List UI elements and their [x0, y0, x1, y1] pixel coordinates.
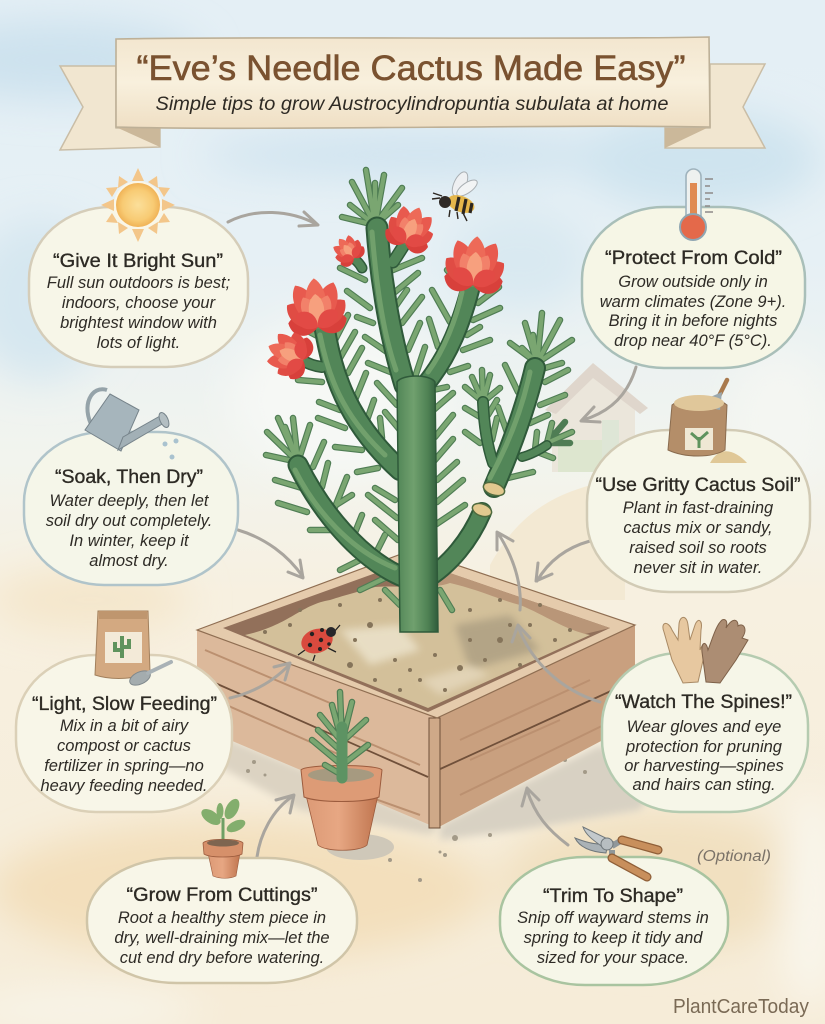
small potted cactus — [301, 692, 394, 860]
flowers — [376, 197, 445, 261]
callout: Watch The Spines!: Wear gloves and eye — [627, 718, 781, 736]
callout: Soak, Then Dry: In winter, keep it — [69, 532, 190, 550]
callout: Grow From Cuttings: “Grow From Cuttings” — [126, 885, 318, 906]
callout: Grow From Cuttings — [87, 858, 357, 983]
icon: watering can — [85, 389, 178, 460]
title: “Eve’s Needle Cactus Made Easy” — [136, 49, 686, 88]
callout: Soak, Then Dry: Water deeply, then let — [50, 492, 210, 510]
arrow: sun to plant — [228, 212, 318, 226]
callout: Use Gritty Cactus Soil: raised soil so roots — [629, 539, 767, 557]
callout: Light, Slow Feeding — [16, 655, 232, 812]
callout: Use Gritty Cactus Soil: “Use Gritty Cactus Soil” — [596, 475, 800, 496]
brand footer: PlantCareToday — [673, 996, 809, 1018]
callout: Soak, Then Dry: almost dry. — [89, 552, 169, 570]
callout: Trim To Shape — [500, 857, 728, 985]
callout: Give It Bright Sun: “Give It Bright Sun” — [53, 251, 223, 272]
callout: Trim To Shape: sized for your space. — [537, 949, 689, 967]
arrow: feeding to planter — [230, 663, 290, 698]
arrow: soil to planter — [536, 541, 590, 581]
callout: Give It Bright Sun — [29, 207, 248, 367]
callout: Grow From Cuttings: dry, well-draining mix—let the — [114, 929, 330, 947]
callout: Light, Slow Feeding: heavy feeding needed. — [41, 777, 207, 795]
icon: bee — [432, 170, 480, 221]
callout: Give It Bright Sun: Full sun outdoors is best; — [47, 274, 231, 292]
icon: thermometer — [680, 169, 713, 240]
arrows — [228, 212, 636, 857]
title banner — [60, 37, 765, 150]
callout: Grow From Cuttings: Root a healthy stem piece in — [118, 909, 326, 927]
cactus spine leaves — [266, 170, 572, 610]
callout: Use Gritty Cactus Soil — [587, 430, 810, 592]
callout: Watch The Spines! — [602, 653, 808, 812]
callout: Protect From Cold: Grow outside only in — [618, 273, 768, 291]
callout: Watch The Spines!: protection for pruning — [625, 738, 783, 756]
callout: Give It Bright Sun: lots of light. — [97, 334, 180, 352]
cactus trunk — [397, 376, 438, 632]
callout: Protect From Cold: warm climates (Zone 9+). — [600, 293, 786, 311]
callout: Trim To Shape: “Trim To Shape” — [543, 886, 683, 907]
arrow: cold to plant — [581, 367, 636, 422]
callout: Light, Slow Feeding: compost or cactus — [57, 737, 191, 755]
ladybug — [298, 625, 340, 661]
cut stem tips — [482, 480, 506, 498]
arrow: trim to planter — [522, 788, 568, 845]
callout: Use Gritty Cactus Soil: cactus mix or sandy, — [623, 519, 773, 537]
icon: fertilizer bag and scoop — [95, 611, 171, 688]
sandy hill — [490, 478, 625, 600]
arrow: spines to soil — [512, 625, 600, 702]
callout: Protect From Cold: drop near 40°F (5°C). — [614, 332, 772, 350]
callout: Use Gritty Cactus Soil: Plant in fast-draining — [623, 499, 774, 517]
callout: Watch The Spines!: and hairs can sting. — [632, 776, 776, 794]
cactus plant — [258, 170, 572, 632]
callout: Watch The Spines!: “Watch The Spines!” — [615, 692, 792, 713]
callout: Soak, Then Dry: “Soak, Then Dry” — [55, 467, 203, 488]
callout: Watch The Spines!: or harvesting—spines — [624, 757, 784, 775]
callout: Light, Slow Feeding: “Light, Slow Feeding” — [32, 694, 217, 715]
callout: Give It Bright Sun: indoors, choose your — [62, 294, 217, 312]
faint house behind cactus — [545, 363, 648, 472]
arrow: cuttings to pot — [257, 795, 294, 857]
callout: Protect From Cold — [582, 207, 805, 368]
callout: Light, Slow Feeding: Mix in a bit of airy — [60, 717, 190, 735]
icon: seedling pot — [199, 796, 247, 878]
arrow: water to planter — [238, 530, 303, 578]
callout: Use Gritty Cactus Soil: never sit in water. — [634, 559, 762, 577]
subtitle: Simple tips to grow Austrocylindropuntia subulata at home — [156, 94, 668, 115]
callout: Give It Bright Sun: brightest window with — [60, 314, 217, 332]
callout: Protect From Cold: “Protect From Cold” — [605, 248, 782, 269]
icon: sun — [101, 168, 175, 242]
icon: soil sack — [668, 380, 747, 463]
callout: Protect From Cold: Bring it in before nights — [609, 312, 777, 330]
callout: Grow From Cuttings: cut end dry before watering. — [120, 949, 324, 967]
cactus stems — [295, 228, 547, 580]
raised wooden planter — [180, 550, 660, 882]
icon: gloves — [663, 617, 748, 683]
callout: Trim To Shape: spring to keep it tidy and — [524, 929, 703, 947]
optional note: (Optional) — [697, 848, 771, 865]
callout: Soak, Then Dry — [24, 432, 238, 585]
icon: pruners — [575, 827, 658, 877]
callout: Light, Slow Feeding: fertilizer in spring—no — [44, 757, 204, 775]
callout: Trim To Shape: Snip off wayward stems in — [517, 909, 709, 927]
callout: Soak, Then Dry: soil dry out completely. — [46, 512, 212, 530]
arrow: soil up to stump — [497, 532, 520, 610]
